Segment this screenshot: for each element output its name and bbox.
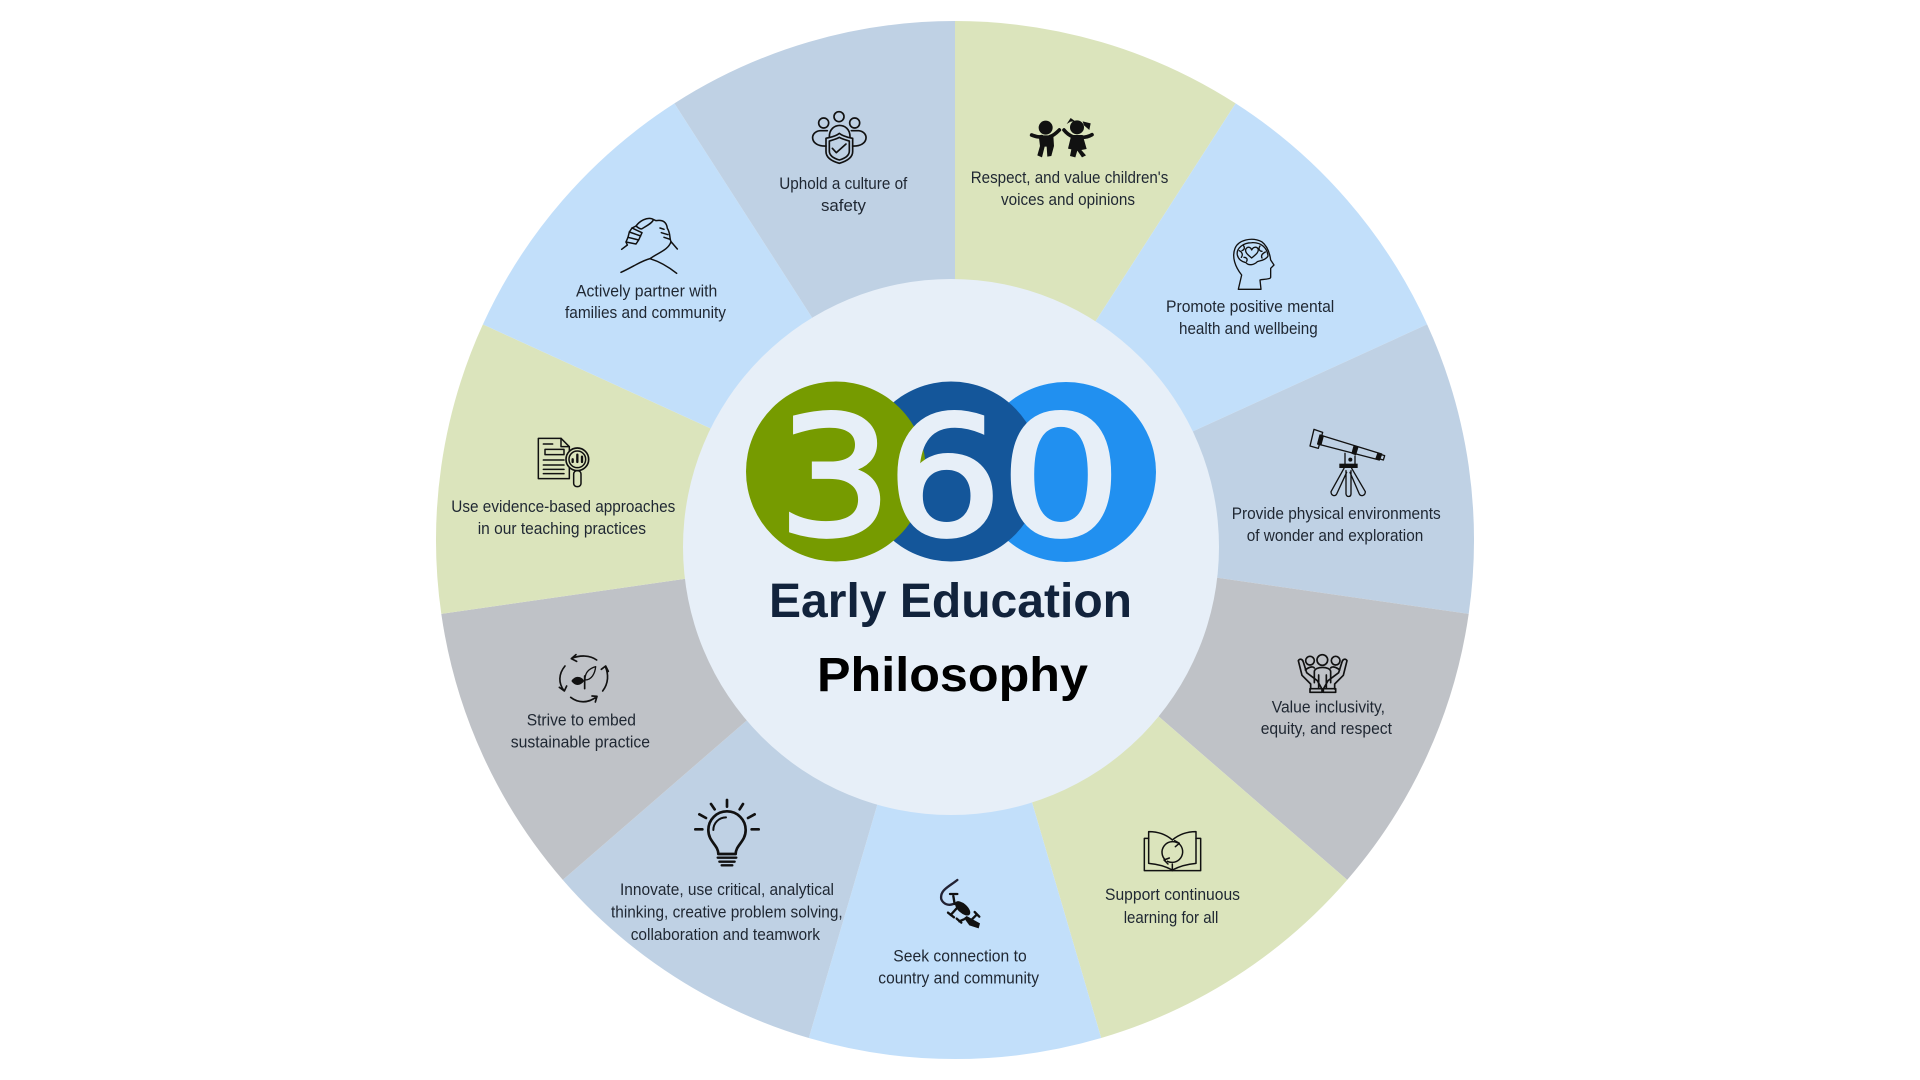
label: evidence-based: Use evidence-based approaches bbox=[451, 498, 675, 516]
label: evidence-based: in our teaching practices bbox=[478, 520, 646, 538]
label: partner with families: families and community bbox=[565, 304, 727, 322]
digit 6: 6 bbox=[887, 382, 1002, 574]
label: sustainable practice: sustainable practice bbox=[511, 734, 650, 752]
label: physical environments bbox=[1232, 505, 1441, 545]
panel: continuous learning bbox=[955, 540, 1347, 1038]
label: culture of safety: Uphold a culture of bbox=[779, 175, 908, 193]
icon: clasped hands bbox=[621, 218, 677, 273]
label: connection to country: country and community bbox=[878, 970, 1040, 988]
label: innovate: thinking, creative problem solving, bbox=[611, 904, 843, 922]
panel: physical environments bbox=[955, 324, 1474, 614]
panel: inclusivity bbox=[955, 540, 1469, 880]
label: continuous learning: learning for all bbox=[1124, 909, 1218, 927]
heading: Early Education: Early Education bbox=[769, 575, 1132, 628]
label: mental health bbox=[1166, 298, 1334, 338]
label: respect: voices and opinions bbox=[1001, 191, 1135, 209]
label: innovate: collaboration and teamwork bbox=[631, 926, 821, 944]
icon: light bulb bbox=[695, 800, 759, 865]
panel: connection to country bbox=[809, 540, 1101, 1059]
icon: people in hands bbox=[1298, 655, 1347, 692]
label: respect bbox=[971, 169, 1168, 209]
icon: brain head bbox=[1234, 239, 1274, 289]
panel: respect children's voices bbox=[955, 21, 1236, 540]
label: mental health: Promote positive mental bbox=[1166, 298, 1334, 316]
icon: sprout with cycle arrows bbox=[559, 655, 608, 702]
panel: innovate bbox=[563, 540, 955, 1038]
label: innovate bbox=[611, 881, 843, 944]
icon: open book with arrows bbox=[1144, 832, 1201, 871]
label: mental health: health and wellbeing bbox=[1179, 320, 1318, 338]
panel: evidence-based bbox=[436, 324, 955, 614]
label: evidence-based bbox=[451, 498, 675, 538]
panel: culture of safety bbox=[674, 21, 955, 540]
label: continuous learning: Support continuous bbox=[1105, 886, 1240, 904]
panel: partner with families bbox=[483, 103, 955, 540]
label: innovate: Innovate, use critical, analytical bbox=[620, 881, 834, 899]
label: continuous learning bbox=[1105, 886, 1240, 927]
label: sustainable practice bbox=[511, 712, 650, 752]
icon: people with shield bbox=[813, 112, 866, 163]
icon: telescope bbox=[1310, 429, 1385, 496]
icon: children bbox=[1032, 118, 1092, 157]
label: physical environments: of wonder and exploration bbox=[1247, 527, 1423, 545]
label: culture of safety bbox=[779, 175, 908, 215]
icon: gecko bbox=[941, 880, 980, 928]
label: connection to country bbox=[878, 948, 1040, 988]
label: inclusivity bbox=[1261, 698, 1392, 738]
label: respect: Respect, and value children's bbox=[971, 169, 1168, 187]
digit 3: 3 bbox=[778, 382, 892, 574]
label: inclusivity: Value inclusivity, bbox=[1272, 698, 1385, 716]
panel: mental health bbox=[955, 103, 1427, 540]
label: sustainable practice: Strive to embed bbox=[527, 712, 636, 730]
label: culture of safety: safety bbox=[821, 197, 867, 215]
digit 0: 0 bbox=[1000, 382, 1122, 574]
icon: document with magnifier bbox=[538, 438, 589, 487]
label: inclusivity: equity, and respect bbox=[1261, 720, 1392, 738]
centre circle bbox=[683, 279, 1219, 815]
panel: sustainable practice bbox=[441, 540, 955, 880]
label: physical environments: Provide physical environments bbox=[1232, 505, 1441, 523]
label: connection to country: Seek connection to bbox=[893, 948, 1027, 966]
heading: Philosophy: Philosophy bbox=[817, 649, 1088, 702]
logo: 360 bbox=[746, 382, 1156, 574]
label: partner with families: Actively partner with bbox=[576, 283, 717, 301]
label: partner with families bbox=[565, 283, 727, 322]
